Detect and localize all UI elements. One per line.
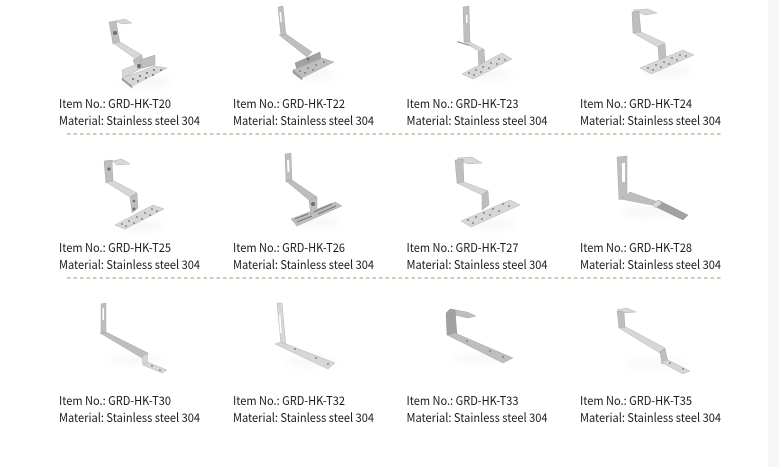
product: GRD-HK-T20: Material: Stainless steel 304 xyxy=(59,112,200,129)
right page scrollbar strip xyxy=(768,0,779,467)
product: GRD-HK-T33 xyxy=(406,309,548,426)
product: GRD-HK-T35 xyxy=(580,308,721,426)
product: GRD-HK-T30: Item No.: GRD-HK-T30 xyxy=(59,392,171,409)
product: GRD-HK-T22 xyxy=(233,6,374,129)
product: GRD-HK-T23: Material: Stainless steel 304 xyxy=(406,112,548,129)
divider: first row xyxy=(67,133,722,135)
product: GRD-HK-T32: Item No.: GRD-HK-T32 xyxy=(233,392,345,409)
product: GRD-HK-T28: Material: Stainless steel 304 xyxy=(580,256,721,273)
product: GRD-HK-T24: Material: Stainless steel 304 xyxy=(580,112,721,129)
product: GRD-HK-T27: Material: Stainless steel 304 xyxy=(406,256,548,273)
product: GRD-HK-T35: Material: Stainless steel 304 xyxy=(580,409,721,426)
product: GRD-HK-T32 xyxy=(233,303,374,426)
product: GRD-HK-T24: Item No.: GRD-HK-T24 xyxy=(580,95,692,112)
product: GRD-HK-T26: Item No.: GRD-HK-T26 xyxy=(233,239,345,256)
product: GRD-HK-T26: Material: Stainless steel 304 xyxy=(233,256,374,273)
product: GRD-HK-T33: Item No.: GRD-HK-T33 xyxy=(406,392,518,409)
product: GRD-HK-T32: Material: Stainless steel 304 xyxy=(233,409,374,426)
product: GRD-HK-T35: Item No.: GRD-HK-T35 xyxy=(580,392,692,409)
product: GRD-HK-T23: Item No.: GRD-HK-T23 xyxy=(406,95,518,112)
product: GRD-HK-T27: Item No.: GRD-HK-T27 xyxy=(406,239,519,256)
product: GRD-HK-T23 xyxy=(406,6,548,129)
product: GRD-HK-T24 xyxy=(580,9,721,129)
product: GRD-HK-T28 xyxy=(580,156,721,273)
product: GRD-HK-T30 xyxy=(59,303,200,426)
product: GRD-HK-T27 xyxy=(406,157,548,273)
product: GRD-HK-T25 xyxy=(59,159,200,273)
product: GRD-HK-T22: Item No.: GRD-HK-T22 xyxy=(233,95,345,112)
product: GRD-HK-T20 xyxy=(59,19,200,129)
product: GRD-HK-T25: Material: Stainless steel 304 xyxy=(59,256,200,273)
product: GRD-HK-T22: Material: Stainless steel 304 xyxy=(233,112,374,129)
product: GRD-HK-T25: Item No.: GRD-HK-T25 xyxy=(59,239,171,256)
product: GRD-HK-T30: Material: Stainless steel 304 xyxy=(59,409,200,426)
divider: second row xyxy=(67,277,722,279)
product: GRD-HK-T33: Material: Stainless steel 304 xyxy=(406,409,548,426)
product: GRD-HK-T20: Item No.: GRD-HK-T20 xyxy=(59,95,171,112)
product: GRD-HK-T26 xyxy=(233,153,374,273)
product: GRD-HK-T28: Item No.: GRD-HK-T28 xyxy=(580,239,692,256)
